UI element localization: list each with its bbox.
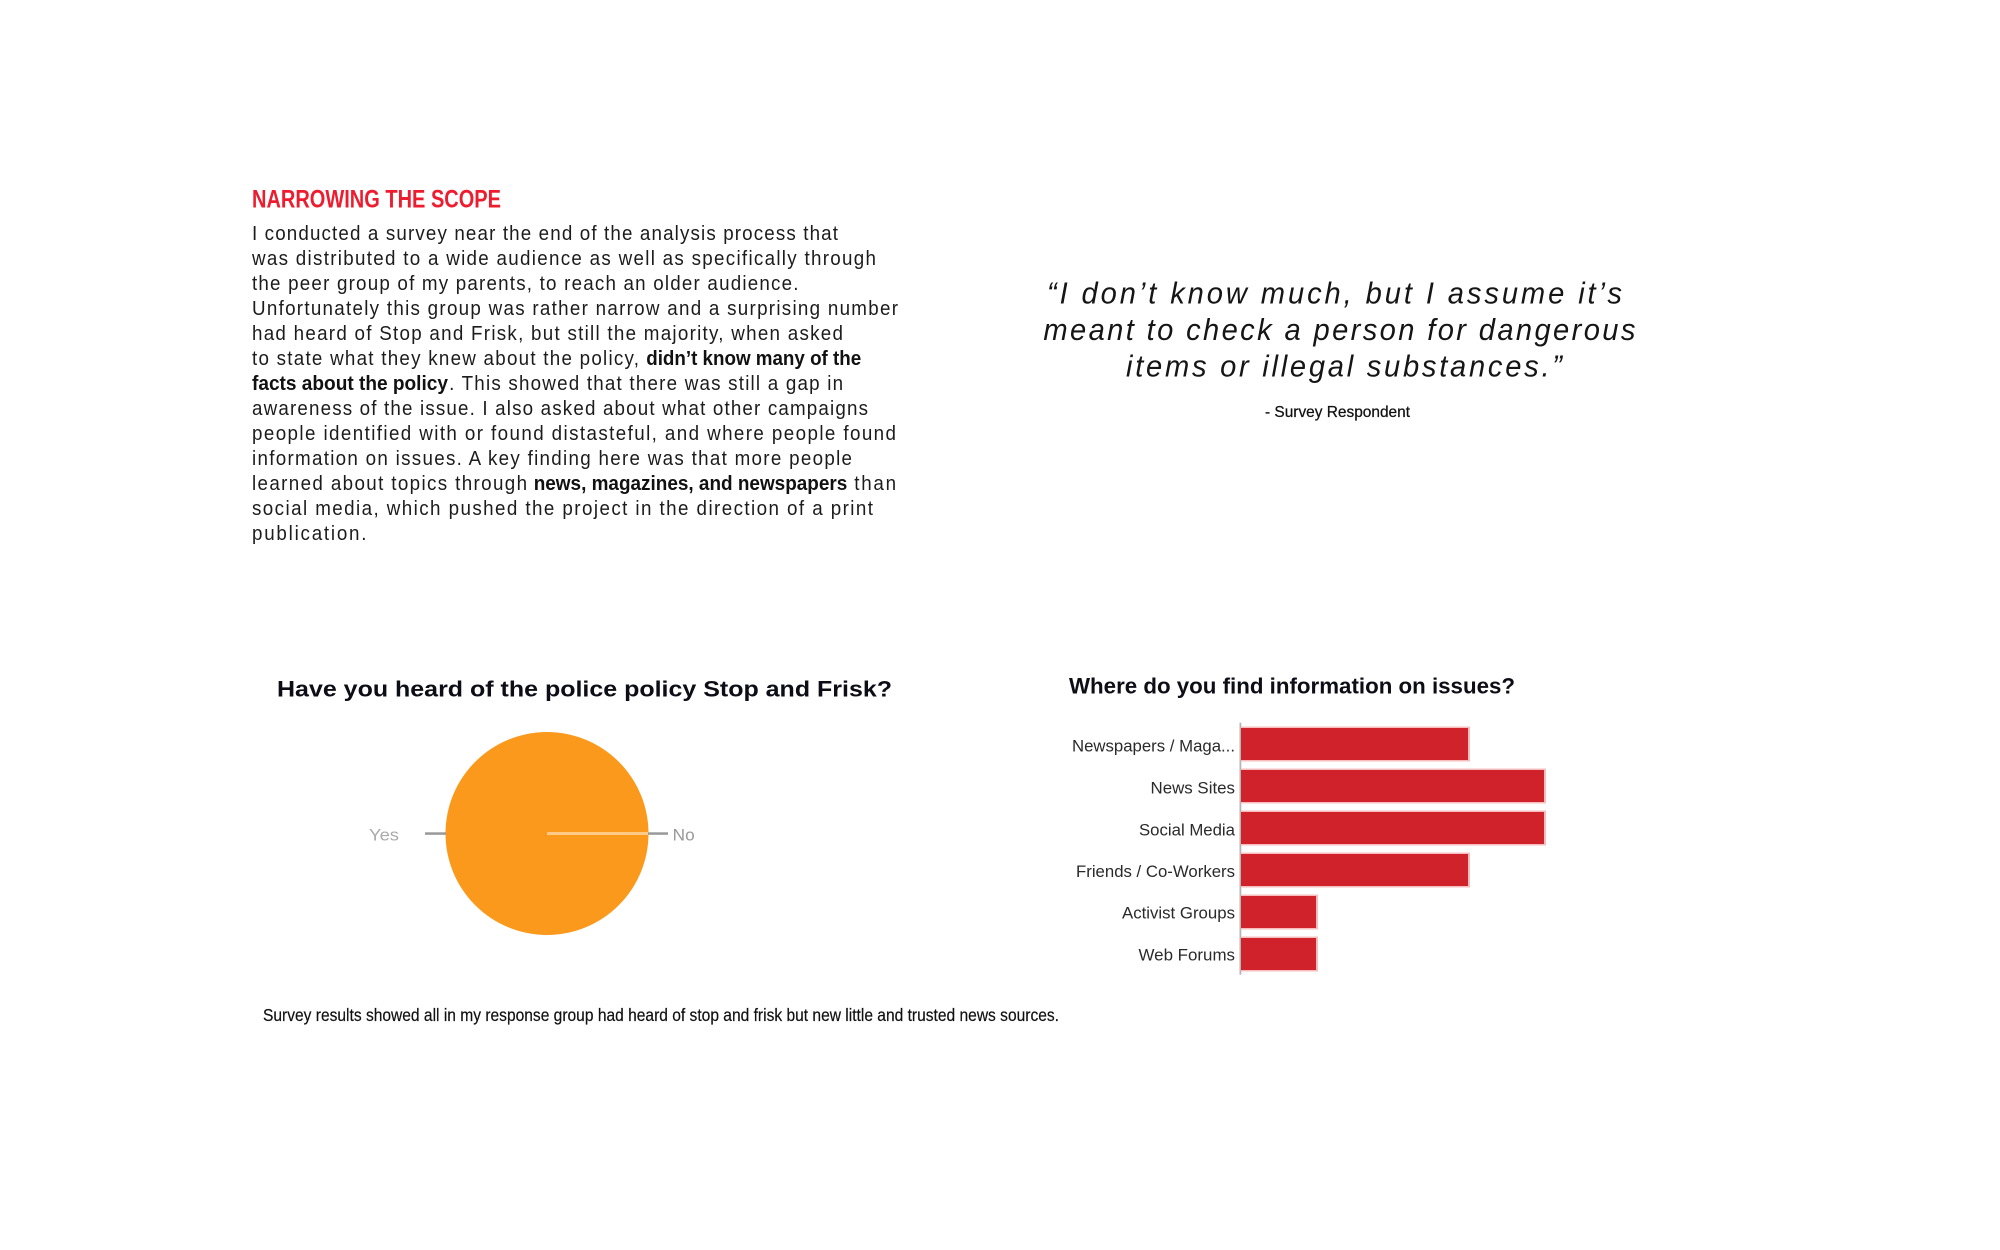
pie chart panel xyxy=(277,676,892,935)
pull quote: items or illegal substances.” xyxy=(1126,350,1564,384)
pull quote: “I don’t know much, but I assume it’s xyxy=(1047,277,1622,311)
body text block: information on issues. A key finding here was that more people xyxy=(252,447,852,470)
bar labels: Newspapers / Maga... xyxy=(1072,736,1235,756)
body text block: didn’t know many of the xyxy=(646,347,861,370)
pie chart title: Have you heard of the police policy Stop and Frisk? xyxy=(277,676,892,702)
leader: no xyxy=(648,832,668,835)
quote attribution: - Survey Respondent xyxy=(1265,404,1411,421)
bar labels: Friends / Co-Workers xyxy=(1076,862,1235,881)
label: yes: Yes xyxy=(369,826,399,844)
label: no: No xyxy=(673,826,695,844)
bar labels xyxy=(1072,736,1236,964)
body text block: social media, which pushed the project in the direction of a print xyxy=(252,497,874,520)
pie: orange circle xyxy=(446,732,648,935)
bar chart panel xyxy=(1069,674,1546,975)
body text block: learned about topics through xyxy=(252,472,527,495)
body text block: to state what they knew about the policy, xyxy=(252,347,639,370)
body text block: Unfortunately this group was rather narrow and a surprising number xyxy=(252,297,898,320)
bar chart title: Where do you find information on issues? xyxy=(1069,674,1515,698)
body text block: awareness of the issue. I also asked about what other campaigns xyxy=(252,397,868,420)
body text block: news, magazines, and newspapers xyxy=(534,472,847,495)
caption: Survey results showed all in my response group had heard of stop and frisk but new little and trusted news sources. xyxy=(263,1005,1059,1025)
body text block xyxy=(251,222,898,545)
body text block: had heard of Stop and Frisk, but still the majority, when asked xyxy=(252,322,843,345)
bar labels: Activist Groups xyxy=(1122,904,1235,922)
leader: yes xyxy=(425,832,446,835)
bar labels: Social Media xyxy=(1139,820,1236,840)
axis xyxy=(1240,723,1241,975)
body text block: I conducted a survey near the end of the analysis process that xyxy=(252,222,839,245)
pie slice seam xyxy=(547,832,648,835)
body text block: publication. xyxy=(252,522,366,545)
bar halos xyxy=(1241,726,1546,972)
bar fills xyxy=(1241,728,1544,970)
bar labels: News Sites xyxy=(1150,778,1235,798)
body text block: facts about the policy xyxy=(252,372,448,395)
body text block: was distributed to a wide audience as well as specifically through xyxy=(251,247,876,270)
bars xyxy=(1241,726,1546,972)
body text block: . This showed that there was still a gap in xyxy=(449,372,843,395)
pull quote: meant to check a person for dangerous xyxy=(1043,313,1635,347)
bar labels: Web Forums xyxy=(1138,946,1235,964)
body text block: people identified with or found distasteful, and where people found xyxy=(252,422,896,445)
pull quote xyxy=(1043,277,1635,384)
body text block: than xyxy=(854,472,896,495)
body text block: the peer group of my parents, to reach an older audience. xyxy=(252,272,799,295)
heading: narrowing the scope: NARROWING THE SCOPE xyxy=(252,186,501,214)
